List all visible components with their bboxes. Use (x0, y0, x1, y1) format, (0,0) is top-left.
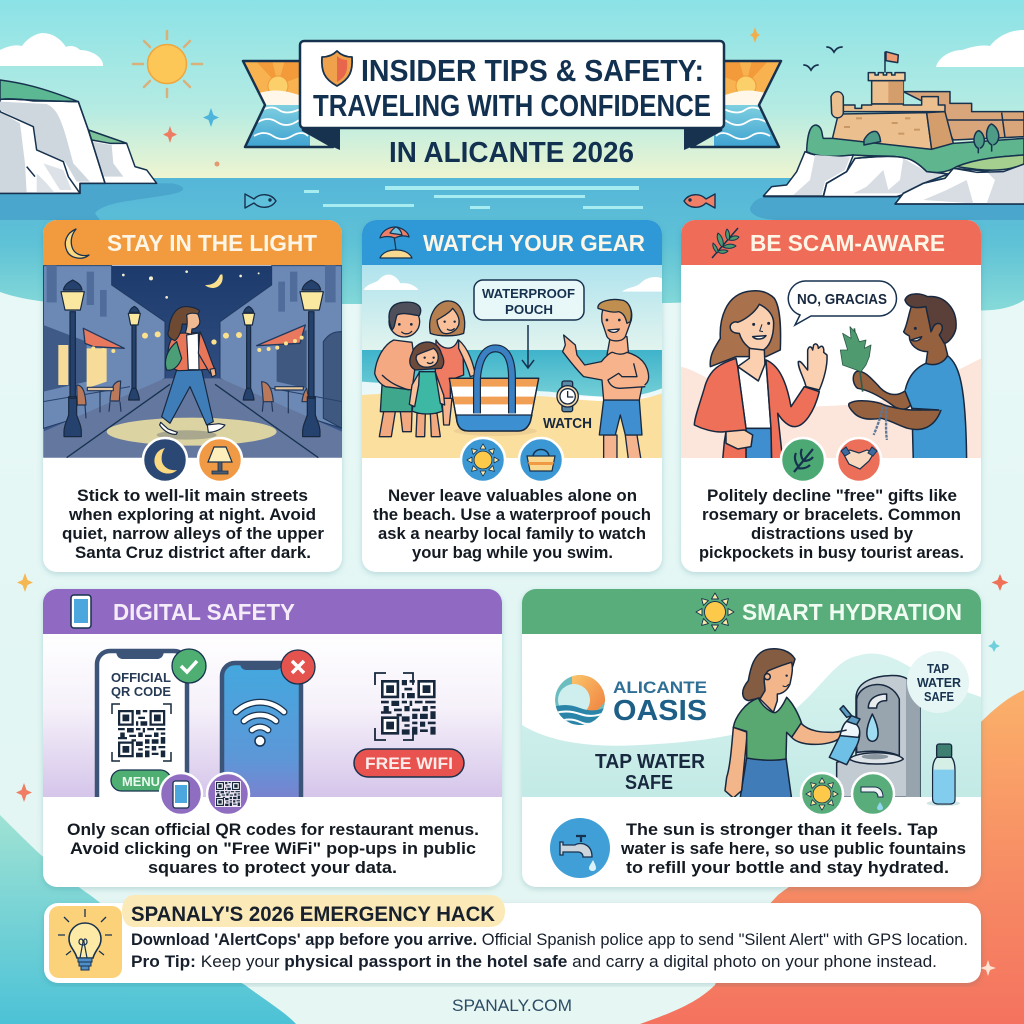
card header: digital safety (43, 589, 502, 634)
drinking fountain (837, 676, 920, 797)
body text: rosemary or bracelets. Common (702, 505, 961, 524)
woman (694, 291, 827, 460)
icon: birds (804, 47, 842, 70)
street lamps (61, 280, 323, 437)
body text (699, 486, 964, 562)
body text: to refill your bottle and stay hydrated. (626, 858, 949, 877)
icon: fish right (684, 194, 715, 208)
illustration: phones and qr (43, 648, 502, 797)
arrow (522, 325, 534, 368)
label: watch: WATCH (543, 416, 592, 432)
rosemary sprig (840, 327, 871, 392)
icon: sun (696, 593, 734, 631)
badge: handshake (837, 438, 881, 482)
footer: spanaly.com: SPANALY.COM (452, 996, 572, 1015)
illustration: declining gifts (681, 290, 981, 458)
icon: leaf sprig (712, 228, 739, 258)
body text: quiet, narrow alleys of the upper (62, 524, 324, 543)
heading: digital safety: DIGITAL SAFETY (113, 599, 295, 625)
cafe furniture (76, 381, 309, 418)
woman filling bottle (725, 649, 860, 799)
callout: waterproof pouch (474, 280, 584, 320)
badge: sun (801, 773, 843, 815)
right buildings (220, 266, 342, 428)
panel: be scam-aware (681, 220, 981, 572)
body text: Avoid clicking on "Free WiFi" pop-ups in public (70, 839, 476, 858)
logo: alicante oasis (555, 675, 706, 725)
hack line 2: Pro Tip: Keep your physical passport in the hotel safe and carry a digital photo on your phone instead. (131, 953, 937, 971)
panel: watch your gear (362, 220, 662, 572)
man (840, 294, 967, 462)
body text: The sun is stronger than it feels. Tap (626, 820, 938, 839)
background sky (0, 0, 1024, 180)
speech bubble: no, gracias: NO, GRACIAS (797, 291, 887, 308)
beach bag (449, 348, 539, 436)
icon: wrist watch (557, 381, 578, 412)
pill: free wifi (354, 749, 464, 777)
body text (373, 486, 651, 562)
panel: emergency hack (44, 895, 981, 983)
body text: the beach. Use a waterproof pouch (373, 505, 651, 524)
cloud left (0, 33, 103, 66)
title banner: left ribbon (240, 58, 340, 150)
logo: alicante oasis: OASIS (613, 695, 707, 727)
background sea (0, 178, 1024, 311)
phone: official qr: QR CODE (111, 685, 171, 699)
body text: your bag while you swim. (412, 543, 613, 562)
illustration: beach scene (362, 265, 662, 465)
icon: shield (322, 51, 352, 86)
body text: when exploring at night. Avoid (68, 505, 316, 524)
body text (620, 820, 966, 877)
body text: Stick to well-lit main streets (77, 486, 308, 505)
icon: fish left (245, 194, 276, 208)
badge: rosemary (781, 438, 825, 482)
label: tap water safe: TAP WATER (595, 751, 706, 773)
title banner: right ribbon (684, 58, 784, 150)
phone: official qr: OFFICIAL (111, 671, 171, 685)
badge: sun (461, 438, 505, 482)
panel: digital safety (43, 589, 502, 887)
hack line 1: Download 'AlertCops' app before you arrive. Official Spanish police app to send "Silent Alert" with GPS location. (131, 931, 968, 949)
card header: be scam-aware (681, 220, 981, 265)
mom (430, 301, 475, 425)
badge: tap water safe: TAP (927, 662, 949, 676)
card header: watch your gear (362, 220, 662, 265)
callout: waterproof pouch: WATERPROOF (482, 286, 575, 301)
body text: ask a nearby local family to watch (378, 524, 646, 543)
title line 2: TRAVELING WITH CONFIDENCE (313, 88, 711, 123)
title line 3: IN ALICANTE 2026 (389, 137, 634, 169)
awnings (83, 328, 124, 348)
body text: Only scan official QR codes for restaurant menus. (67, 820, 479, 839)
phone: official qr: MENU (122, 774, 160, 789)
icon: beach umbrella (380, 227, 412, 258)
illustration: night street (43, 266, 342, 458)
water bottle (927, 744, 960, 806)
badge: tap water safe: WATER (917, 676, 961, 690)
speech bubble: no, gracias (788, 281, 896, 325)
left cliffs (0, 80, 183, 220)
road (43, 378, 342, 458)
icon: check badge (172, 649, 206, 683)
body text: Santa Cruz district after dark. (75, 543, 311, 562)
panel: stay in the light (43, 220, 342, 572)
heading: smart hydration: SMART HYDRATION (742, 599, 962, 625)
icon: sun (133, 31, 202, 97)
sea ripples (304, 186, 643, 209)
badge: tap water safe (907, 651, 969, 713)
badge: bag (519, 438, 563, 482)
background blob: bottom-right coral (640, 690, 1024, 1024)
icon: cross badge (281, 650, 315, 684)
title line 1: INSIDER TIPS & SAFETY: (361, 53, 704, 88)
body text: water is safe here, so use public fountains (620, 839, 966, 858)
left buildings (43, 266, 165, 428)
heading: stay in the light: STAY IN THE LIGHT (107, 230, 317, 256)
body text: Politely decline "free" gifts like (707, 486, 957, 505)
body text: Never leave valuables alone on (388, 486, 637, 505)
walking woman (160, 307, 225, 434)
body text: distractions used by (751, 524, 914, 543)
dad (375, 302, 421, 437)
man pointing (563, 300, 649, 462)
phone: wifi (222, 662, 301, 823)
qr code: free wifi (375, 673, 436, 740)
body text: squares to protect your data. (148, 858, 397, 877)
title box (300, 41, 724, 128)
highlight: hack title: SPANALY'S 2026 EMERGENCY HACK (131, 903, 495, 926)
badge: qr (207, 773, 249, 815)
label: tap water safe (595, 754, 704, 789)
highlight: hack title (122, 895, 505, 927)
icon: phone (71, 595, 91, 628)
background blob: bottom-left teal (0, 815, 296, 1024)
badge: moon (143, 438, 187, 482)
badge: lamp (198, 438, 242, 482)
body text (67, 820, 479, 877)
cloud right (936, 30, 1024, 67)
badge: tap water safe: SAFE (924, 690, 954, 704)
heading: be scam-aware: BE SCAM-AWARE (750, 230, 945, 256)
label: tap water safe: SAFE (625, 772, 673, 794)
icon: light bulb (49, 906, 122, 978)
callout: waterproof pouch: POUCH (505, 302, 553, 317)
castle (750, 52, 1024, 220)
icon: crescent moon (65, 229, 89, 258)
card header: stay in the light (43, 220, 342, 265)
badge: tap (852, 773, 894, 815)
phone: official qr (97, 650, 187, 821)
logo: alicante oasis: ALICANTE (613, 678, 707, 697)
icon: tap circle (550, 818, 610, 878)
heading: watch your gear: WATCH YOUR GEAR (423, 230, 645, 256)
panel: smart hydration (522, 589, 981, 887)
badge: phone (160, 773, 202, 815)
stars and moon (205, 274, 223, 288)
pill: free wifi: FREE WIFI (365, 754, 453, 773)
body text (62, 486, 324, 562)
illustration: water fountain (522, 634, 981, 799)
girl (409, 342, 445, 437)
body text: pickpockets in busy tourist areas. (699, 543, 964, 562)
card header: smart hydration (522, 589, 981, 634)
